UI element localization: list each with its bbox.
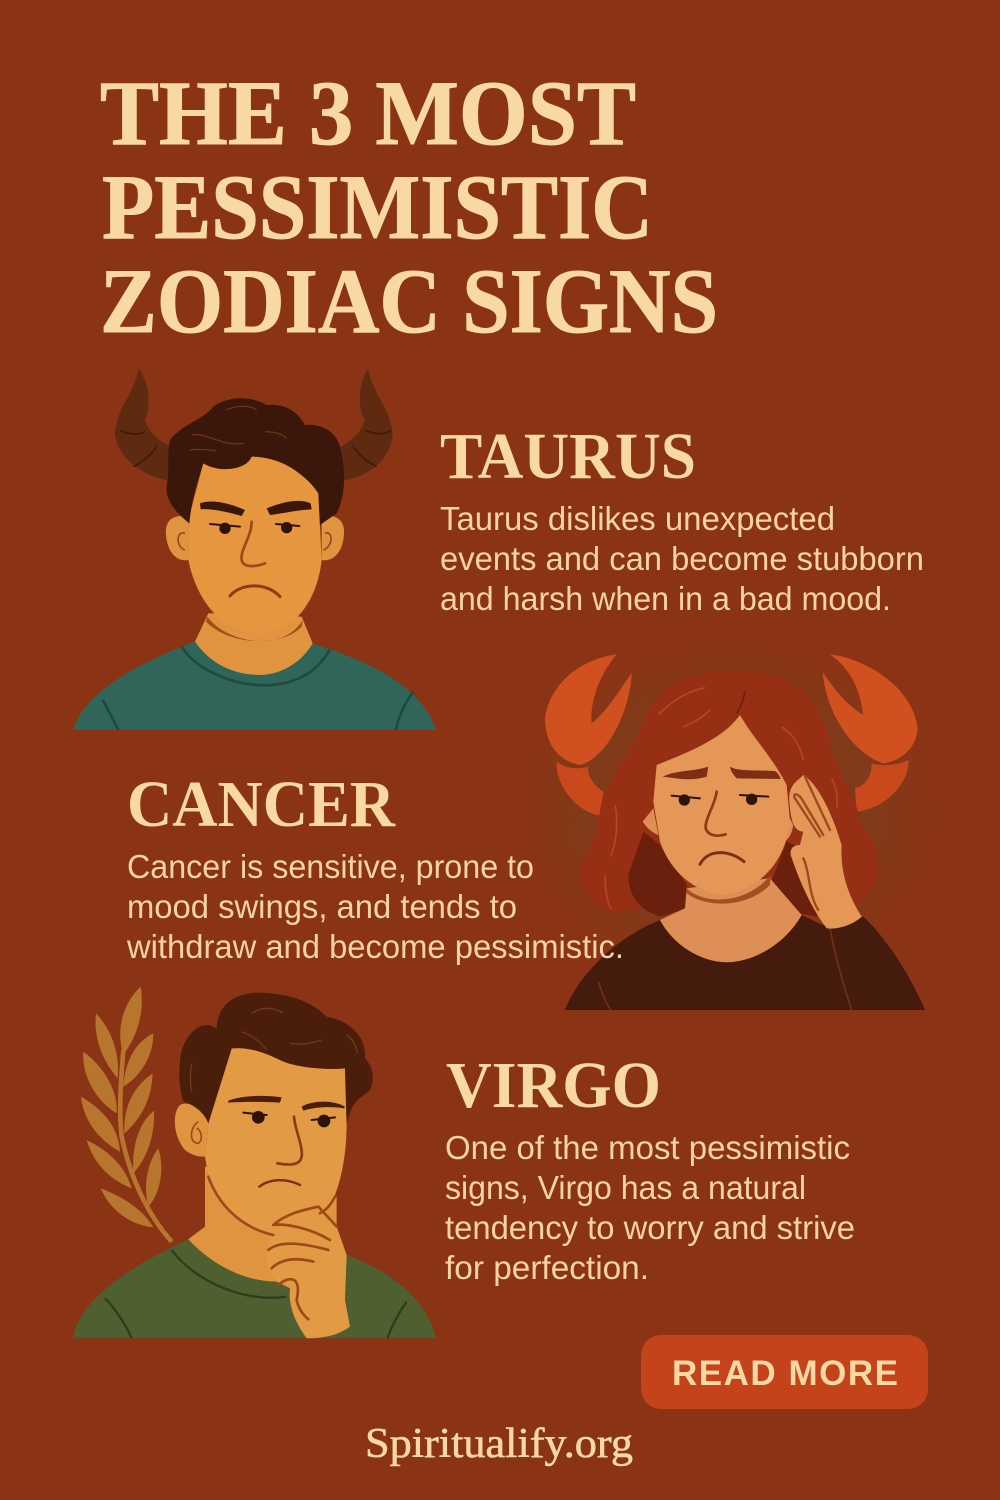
text: Cancer description: Cancer is sensitive, prone to [127, 848, 534, 885]
text: Cancer description: mood swings, and tends to [127, 888, 517, 925]
button: read more: READ MORE [672, 1354, 898, 1393]
text: Taurus description [440, 500, 924, 617]
heading: Virgo: VIRGO [446, 1049, 661, 1122]
heading: Taurus: TAURUS [440, 420, 696, 493]
button: read more [641, 1335, 928, 1409]
text: Virgo description: One of the most pessimistic [445, 1129, 850, 1166]
text: Cancer description: withdraw and become pessimistic. [126, 928, 624, 965]
footer: site name: Spiritualify.org [365, 1421, 633, 1467]
text: Virgo description: tendency to worry and strive [445, 1209, 855, 1246]
title: THE 3 MOST [100, 62, 636, 164]
heading: Cancer: CANCER [127, 768, 396, 841]
illustration: Virgo man with leaf branch [73, 987, 436, 1338]
title: ZODIAC SIGNS [100, 250, 718, 352]
illustration: Cancer woman with claws [523, 645, 937, 1010]
title [100, 62, 718, 352]
illustration: Taurus man with horns [73, 368, 436, 730]
text: Virgo description: signs, Virgo has a natural [445, 1169, 806, 1206]
text: Virgo description: for perfection. [445, 1249, 649, 1286]
text: Taurus description: events and can become stubborn [440, 540, 924, 577]
text: Taurus description: Taurus dislikes unexpected [440, 500, 835, 537]
title: PESSIMISTIC [102, 156, 653, 258]
text: Cancer description [126, 848, 624, 965]
text: Taurus description: and harsh when in a bad mood. [440, 580, 891, 617]
text: Virgo description [445, 1129, 855, 1286]
